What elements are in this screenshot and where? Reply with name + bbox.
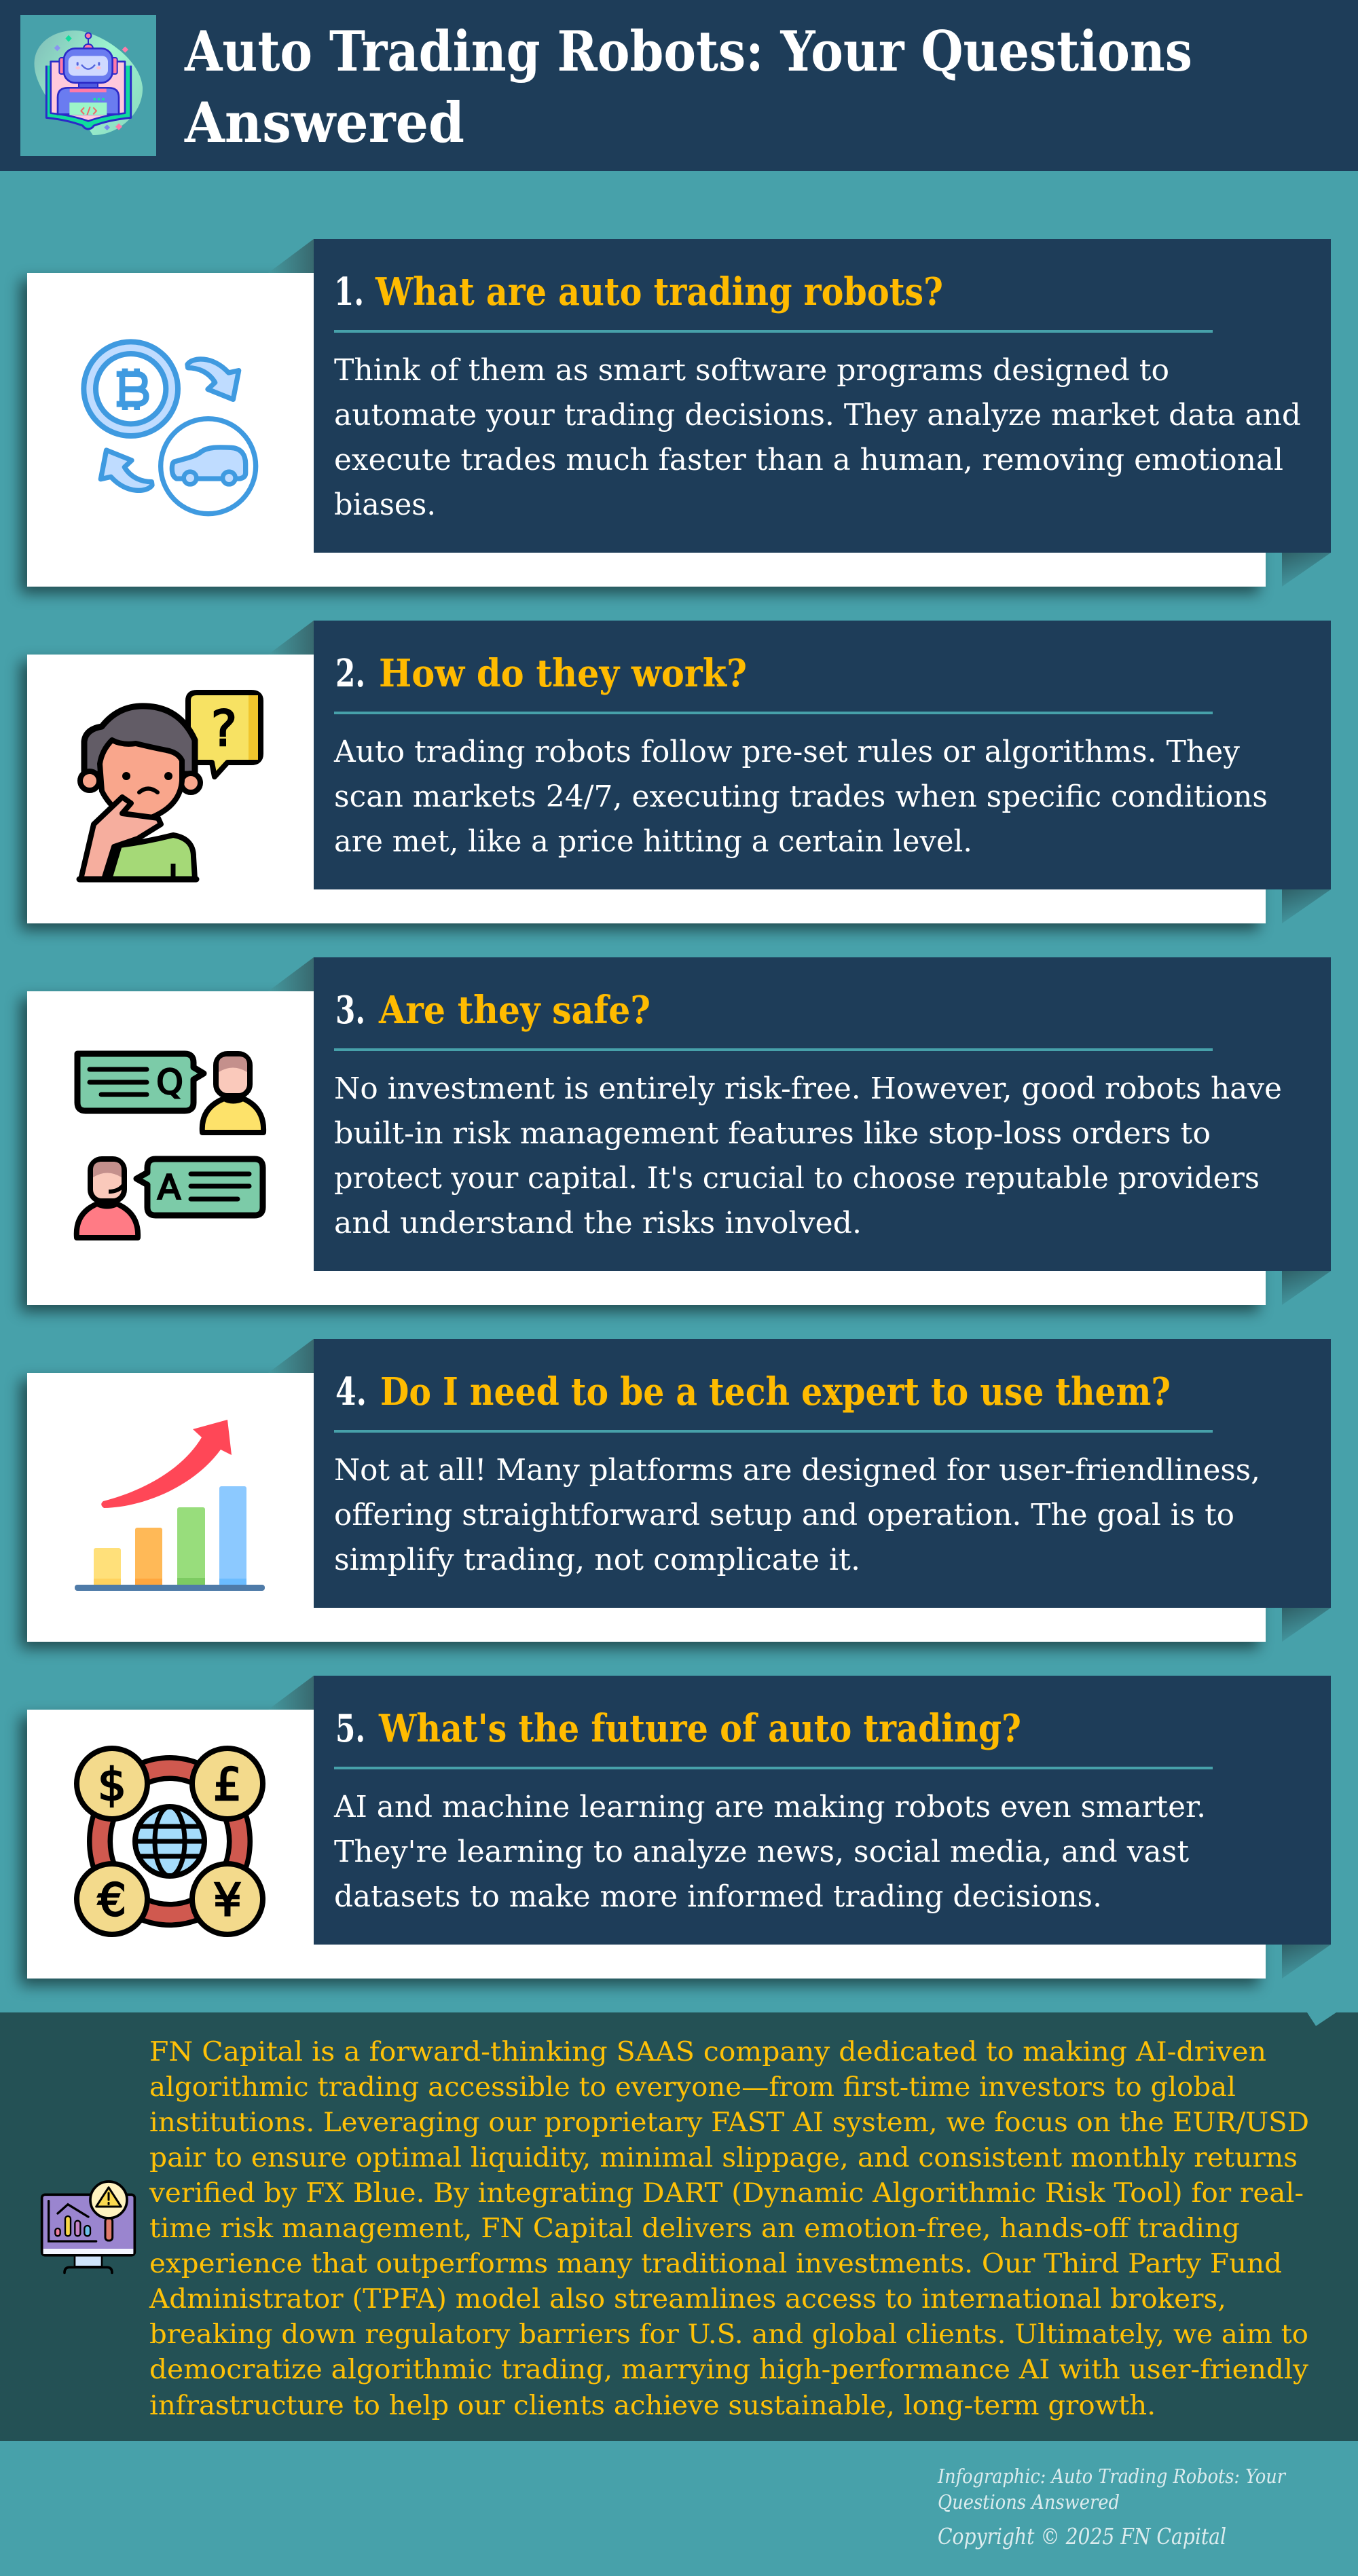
icon: question and answer chat: [77, 1054, 263, 1238]
heading: 1.: [334, 270, 364, 314]
body text: and understand the risks involved.: [334, 1206, 862, 1240]
body text: [334, 1453, 1260, 1577]
company description text: infrastructure to help our clients achieve sustainable, long-term growth.: [149, 2391, 1156, 2421]
company description text: [149, 2037, 1309, 2421]
company description text: breaking down regulatory barriers for U.S. and global clients. Ultimately, we aim to: [149, 2319, 1308, 2350]
body text: [333, 735, 1268, 859]
icon: question and answer chat: Q: [156, 1063, 183, 1102]
panel: question 1: [20, 239, 1331, 593]
body text: biases.: [334, 487, 436, 522]
heading: 3.: [335, 988, 365, 1033]
body text: built-in risk management features like stop-loss orders to: [334, 1116, 1211, 1151]
body text: They're learning to analyze news, social media, and vast: [334, 1835, 1189, 1869]
icon: currencies around globe: £: [213, 1759, 242, 1811]
footer credits: Copyright © 2025 FN Capital: [938, 2523, 1226, 2550]
body text: Not at all! Many platforms are designed for user-friendliness,: [334, 1453, 1260, 1488]
company description text: FN Capital is a forward-thinking SAAS company dedicated to making AI-driven: [149, 2037, 1266, 2067]
company description text: democratize algorithmic trading, marrying high-performance AI with user-friendly: [149, 2355, 1308, 2385]
icon: currencies around globe: ¥: [213, 1874, 242, 1926]
panel: question 5: [20, 1676, 1331, 1985]
icon: thinking person with question bubble: [79, 693, 261, 879]
panel: question 2: [20, 621, 1331, 930]
company description text: algorithmic trading accessible to everyone—from first-time investors to global: [149, 2072, 1236, 2103]
icon: growth bar chart with arrow: [75, 1420, 265, 1591]
icon: question and answer chat: A: [158, 1168, 181, 1207]
body text: [334, 1071, 1282, 1240]
body text: simplify trading, not complicate it.: [334, 1543, 860, 1577]
body text: protect your capital. It's crucial to choose reputable providers: [334, 1161, 1260, 1196]
icon: currencies around globe: €: [98, 1874, 126, 1926]
heading: 4.: [335, 1369, 367, 1414]
body text: AI and machine learning are making robots even smarter.: [333, 1790, 1206, 1824]
icon: bitcoin and car exchange: [84, 342, 256, 514]
icon: currencies around globe: [77, 1748, 263, 1934]
body text: execute trades much faster than a human, removing emotional: [334, 443, 1283, 477]
panel: question 4: [20, 1339, 1331, 1649]
body text: automate your trading decisions. They analyze market data and: [334, 398, 1301, 433]
body text: offering straightforward setup and operation. The goal is to: [334, 1498, 1234, 1532]
heading: 2.: [335, 651, 365, 696]
body text: scan markets 24/7, executing trades when specific conditions: [334, 779, 1268, 814]
footer credits: [937, 2465, 1287, 2550]
heading: What's the future of auto trading?: [378, 1706, 1021, 1751]
icon: robot on book logo: [20, 15, 156, 156]
panel: about FN Capital: [0, 2012, 1358, 2441]
body text: [334, 353, 1301, 522]
heading: 5.: [335, 1706, 365, 1751]
panel: question 3: [20, 957, 1331, 1312]
heading: Are they safe?: [378, 988, 650, 1033]
body text: [333, 1790, 1206, 1914]
heading: What are auto trading robots?: [375, 270, 943, 314]
company description text: experience that outperforms many traditional investments. Our Third Party Fund: [149, 2249, 1282, 2279]
company description text: pair to ensure optimal liquidity, minimal slippage, and consistent monthly returns: [149, 2143, 1298, 2173]
body text: are met, like a price hitting a certain level.: [334, 824, 972, 859]
icon: currencies around globe: $: [98, 1759, 126, 1811]
title: Answered: [184, 91, 464, 155]
company description text: Administrator (TPFA) model also streamlines access to international brokers,: [149, 2284, 1226, 2315]
footer credits: Infographic: Auto Trading Robots: Your: [937, 2465, 1287, 2488]
company description text: institutions. Leveraging our proprietary FAST AI system, we focus on the EUR/USD: [149, 2108, 1309, 2138]
title: [184, 20, 1192, 155]
header band: [0, 0, 1358, 171]
company description text: time risk management, FN Capital delivers an emotion-free, hands-off trading: [149, 2213, 1240, 2244]
footer credits: Questions Answered: [938, 2490, 1120, 2514]
heading: Do I need to be a tech expert to use them?: [380, 1369, 1171, 1414]
body text: Auto trading robots follow pre-set rules or algorithms. They: [333, 735, 1240, 769]
body text: No investment is entirely risk-free. However, good robots have: [334, 1071, 1282, 1106]
body text: Think of them as smart software programs designed to: [334, 353, 1169, 388]
company description text: verified by FX Blue. By integrating DART (Dynamic Algorithmic Risk Tool) for real-: [149, 2178, 1304, 2209]
heading: How do they work?: [379, 651, 747, 696]
icon: thinking person with question bubble: ?: [211, 700, 237, 757]
icon: monitor with warning magnifier: [42, 2182, 134, 2273]
title: Auto Trading Robots: Your Questions: [184, 20, 1192, 84]
body text: datasets to make more informed trading decisions.: [334, 1879, 1102, 1914]
